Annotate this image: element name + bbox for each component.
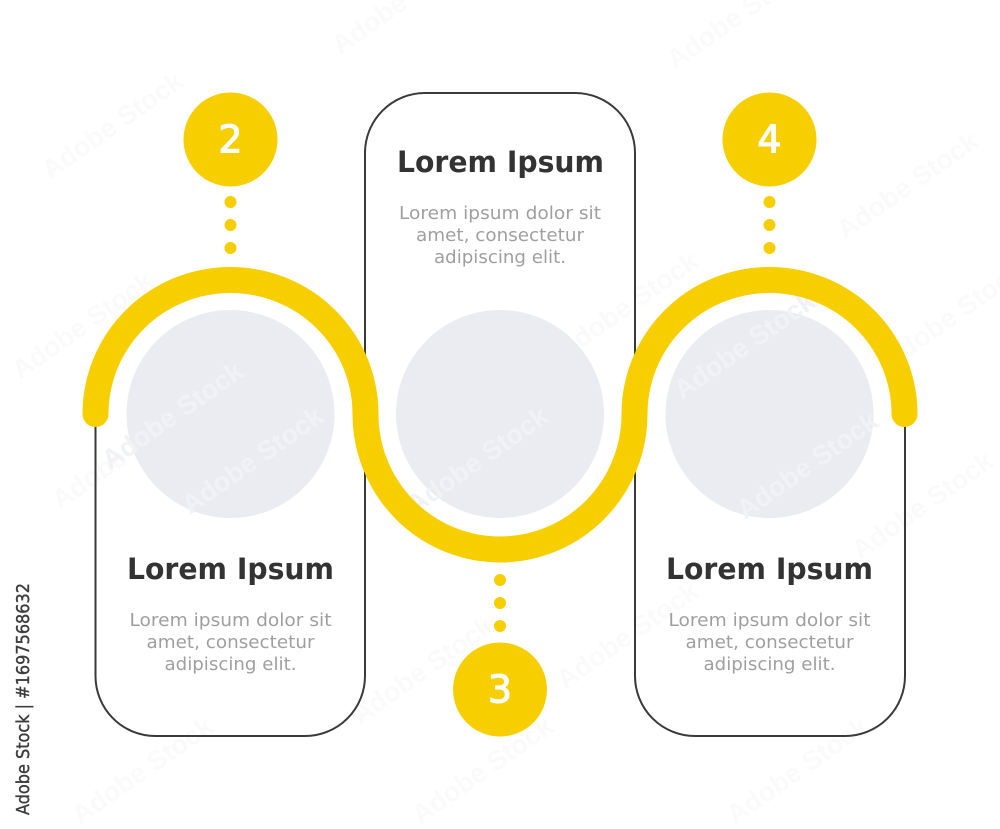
step 3 heading: Lorem Ipsum [397, 145, 604, 179]
step 3 badge [453, 642, 547, 736]
image placeholder: left circle [126, 310, 334, 518]
step 3 description: amet, consectetur [416, 226, 585, 246]
step 3 description: Lorem ipsum dolor sit [399, 204, 601, 224]
step 4 description: adipiscing elit. [704, 655, 836, 675]
watermark: Adobe Stock [551, 575, 704, 695]
watermark: Adobe Stock [406, 710, 559, 829]
placeholder watermark: Adobe Stock [96, 355, 249, 475]
watermark: Adobe Stock [346, 610, 499, 730]
step 4 description: amet, consectetur [686, 633, 854, 653]
stock credit: Adobe Stock | #1697568632 [14, 583, 34, 815]
watermark: Adobe Stock [831, 125, 984, 245]
step 3 description [399, 204, 601, 268]
step 2 description [130, 611, 332, 675]
step 4 badge [722, 92, 816, 186]
image placeholder: right circle [666, 310, 874, 518]
watermark: Adobe Stock [551, 245, 704, 365]
step 3 badge: 3 [488, 668, 512, 712]
step 4 dotted connector [764, 196, 776, 254]
placeholder watermark [96, 285, 884, 525]
step 4 description: Lorem ipsum dolor sit [668, 611, 871, 631]
placeholder watermark: Adobe Stock [668, 285, 821, 405]
step 2 description: Lorem ipsum dolor sit [130, 611, 332, 631]
step 2 heading: Lorem Ipsum [127, 552, 334, 586]
watermark: Adobe Stock [846, 445, 999, 565]
step 3 description: adipiscing elit. [434, 248, 566, 268]
placeholder watermark: Adobe Stock [176, 400, 329, 520]
panel: step 3 card outline [365, 93, 635, 414]
step 2 description: amet, consectetur [146, 633, 315, 653]
step 2 dotted connector [224, 196, 236, 254]
step 4 badge: 4 [757, 118, 782, 162]
image placeholder: center circle [396, 310, 604, 518]
watermark: Adobe Stock [66, 710, 219, 829]
step 2 description: adipiscing elit. [164, 655, 296, 675]
watermark: Adobe Stock [6, 265, 159, 385]
yellow wave connector [96, 280, 904, 549]
step 4 heading: Lorem Ipsum [666, 552, 873, 586]
watermark: Adobe Stock [36, 65, 189, 185]
panel: step 2 card outline [96, 150, 365, 736]
watermark: Adobe Stock [46, 395, 199, 515]
step 2 badge: 2 [218, 118, 243, 162]
watermark: Adobe Stock [721, 710, 874, 829]
panel: step 4 card outline [635, 414, 905, 736]
step 3 dotted connector [494, 574, 506, 632]
step 4 description [668, 611, 871, 675]
step 2 badge [184, 92, 278, 186]
placeholder watermark: Adobe Stock [401, 400, 554, 520]
placeholder watermark: Adobe Stock [731, 405, 884, 525]
